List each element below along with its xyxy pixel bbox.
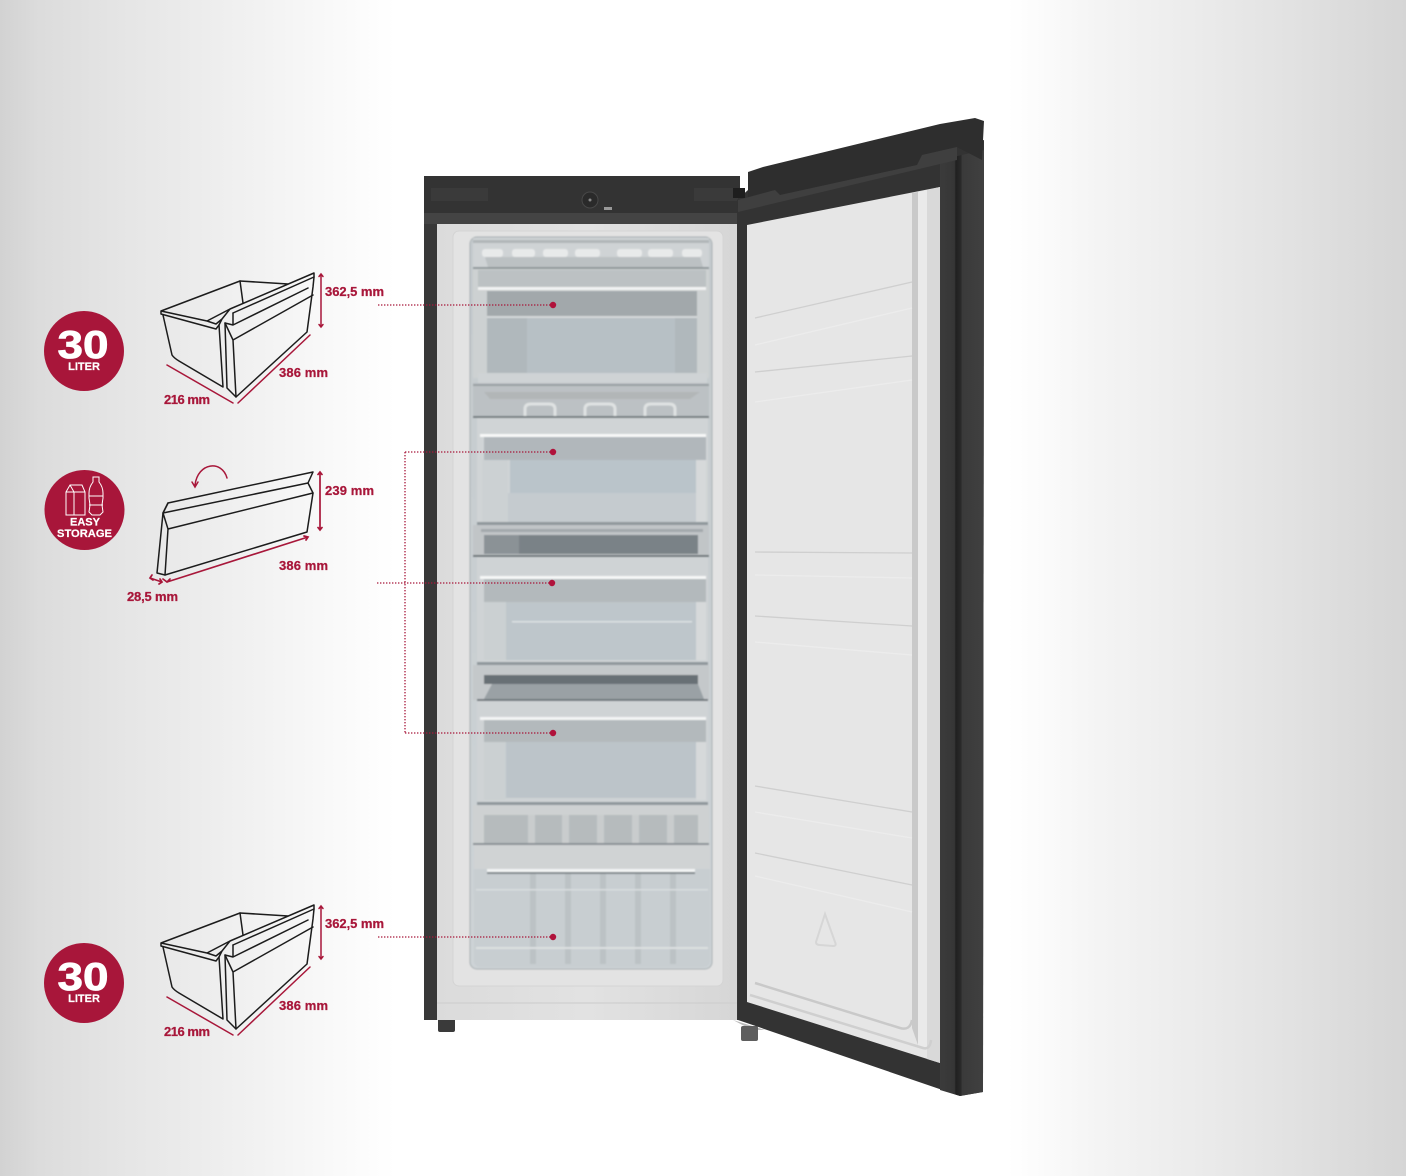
freezer body [424,176,765,1041]
door frame [737,140,984,1096]
open door [733,118,984,1096]
badge: easy storage: EASY [70,516,101,528]
dimension labels: 362,5 mm [325,284,384,299]
drawer 4 [477,701,708,805]
door gasket strip [912,187,940,1063]
badge: easy storage [44,470,124,550]
door top cap [748,118,984,197]
badge: 30 liter bottom: 30 [58,956,108,999]
icon: top drawer with dimensions: 386 mm [279,365,328,380]
hinge [733,188,745,198]
icon: bottom drawer with dimensions [161,905,384,1039]
drawer 1 [473,269,709,383]
door frame highlight [738,147,957,212]
badge: 30 liter top: 30 [58,324,108,367]
drawer 3 [477,557,708,665]
callout: leader lines [377,302,556,940]
shelf 5 [473,805,709,845]
badge: 30 liter bottom [44,943,124,1023]
icon: top drawer with dimensions: 216 mm [164,392,210,407]
icon: bottom drawer with dimensions: 216 mm [164,1024,210,1039]
icon: top drawer with dimensions [161,273,384,407]
dimension arrows [167,906,323,1035]
icon: drawer front with dimensions [127,466,374,604]
drawer line art [161,273,314,397]
shelf 3 [473,525,709,557]
icon: milk carton [66,485,85,515]
drawer line art [161,905,314,1029]
shelf 1 [473,238,709,269]
icon: drawer front with dimensions: 28,5 mm [127,589,178,604]
badge: 30 liter top [44,311,124,391]
feet [438,1018,765,1041]
panel line art [157,472,313,575]
dimension arrows [167,274,323,403]
dimension labels: 239 mm [325,483,374,498]
icon: bottle [89,477,103,515]
inner liner [437,224,737,1020]
door side band [940,150,984,1096]
shelf 2 [473,383,709,418]
drawer 5 [474,845,710,967]
cavity [470,237,712,969]
shelf 4 [473,665,709,701]
drawer 2 [477,418,708,525]
dimension labels: 362,5 mm [325,916,384,931]
dimension arrows [150,472,322,584]
cabinet shell [424,176,740,1020]
icon: drawer front with dimensions: 386 mm [279,558,328,573]
badge: 30 liter top: LITER [68,361,100,373]
icon: bottom drawer with dimensions: 386 mm [279,998,328,1013]
freezer interior [470,237,712,969]
curved arrow [192,466,227,487]
badge: easy storage: STORAGE [57,528,112,540]
top control band [424,176,740,224]
door inner panel [747,187,940,1063]
badge: 30 liter bottom: LITER [68,993,100,1005]
door panel ribs [750,282,931,1048]
icon: recycling triangle [816,914,836,946]
